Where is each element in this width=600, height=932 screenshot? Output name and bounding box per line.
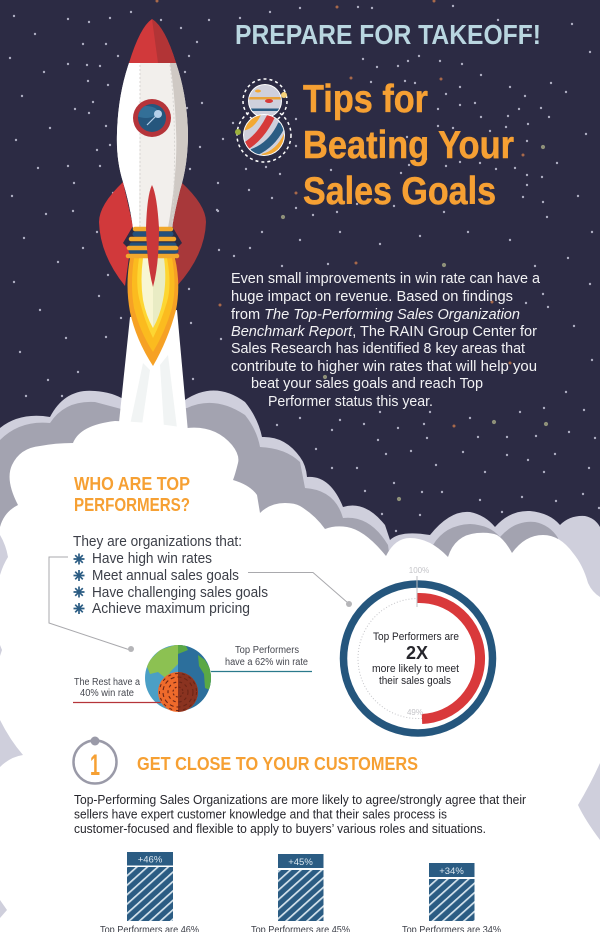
space background [0,0,600,600]
heading: tips for beating your sales goals [303,78,514,213]
heading: tips for beating your sales goals: Tips for [303,78,428,121]
section 1 paragraph: sellers have expert customer knowledge and that their sales process is [74,808,447,822]
rocket fins [99,182,206,286]
heading: who are top performers: PERFORMERS? [74,494,190,515]
organizations list: Achieve maximum pricing [92,601,250,617]
top performers win rate label: Top Performers [235,645,299,656]
intro text: huge impact on revenue. Based on findings [231,288,513,305]
organizations list: Have challenging sales goals [92,585,268,601]
intro text: beat your sales goals and reach Top [251,375,483,392]
section 1 paragraph [74,793,527,836]
rocket body [117,63,188,228]
rocket window [133,99,171,137]
bar: +45% [251,854,350,932]
bar: +46%: +46% [138,854,163,866]
stars [10,1,599,531]
lava planet [158,672,198,712]
rocket flame [128,258,178,366]
organizations list [73,534,268,617]
heading: who are top performers: WHO ARE TOP [74,473,190,494]
list bullets [74,554,84,614]
bar: +34% [402,863,501,932]
organizations list: Meet annual sales goals [92,568,239,584]
title: prepare for takeoff: PREPARE FOR TAKEOFF! [235,19,541,50]
rocket exhaust [118,310,188,432]
bar: +46% [100,852,199,932]
earth [145,645,211,710]
connector: win rates to globe [49,557,134,652]
organizations list: Have high win rates [92,551,212,567]
heading: tips for beating your sales goals: Sales Goals [303,170,496,213]
rocket nose cone [129,19,176,63]
intro text: Benchmark Report, The RAIN Group Center for [231,323,537,340]
middle cloud layer [0,402,560,570]
gauge: 2X more likely: their sales goals [379,675,451,687]
number 1 badge: 1 [90,749,100,782]
intro text: contribute to higher win rates that will help you [231,358,537,375]
gauge: 2X more likely [344,566,492,733]
rocket [99,15,206,432]
intro text: from The Top-Performing Sales Organization [231,306,520,323]
intro text: Performer status this year. [268,393,433,410]
intro text [231,270,541,410]
heading: who are top performers [74,473,190,515]
intro text: Even small improvements in win rate can have a [231,270,541,287]
heading: get close to your customers: GET CLOSE TO YOUR CUSTOMERS [137,753,418,774]
heading: tips for beating your sales goals: Beating Your [303,124,514,167]
connector: sales goals to gauge [248,572,352,607]
the rest win rate label [73,677,161,702]
rocket engine rings [128,229,177,256]
gauge: 2X more likely: 100% [409,566,429,575]
the rest win rate label: 40% win rate [80,688,134,699]
top performers win rate label: have a 62% win rate [225,657,308,668]
number 1 badge [74,736,116,784]
bar: +34%: +34% [439,866,464,877]
the rest win rate label: The Rest have a [74,677,140,688]
rocket center fin [146,185,159,287]
front white cloud [0,421,600,932]
gauge: 2X more likely: 2X [406,643,428,663]
organizations list: They are organizations that: [73,534,242,550]
back cloud layer [0,390,600,932]
gauge: 2X more likely: Top Performers are [373,631,459,643]
section 1 paragraph: Top-Performing Sales Organizations are more likely to agree/strongly agree that their [74,793,527,807]
gauge: 2X more likely: 49% [407,708,423,717]
gauge: 2X more likely: more likely to meet [372,663,459,675]
section 1 paragraph: customer-focused and flexible to apply to buyers’ various roles and situations. [74,822,486,836]
bar: +45%: +45% [288,857,313,868]
top performers win rate label [211,645,312,672]
globe with win rate comparison [73,645,312,712]
planets icon: number 8 [235,79,291,162]
intro text: Sales Research has identified 8 key areas that [231,340,526,357]
